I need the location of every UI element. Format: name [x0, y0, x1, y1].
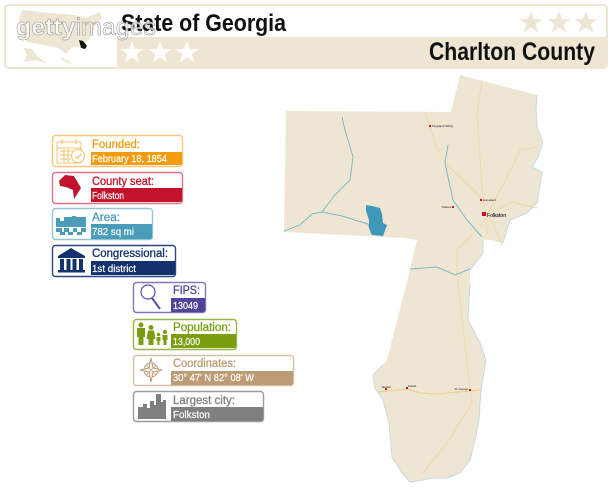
town: Toledo	[406, 384, 417, 389]
panel: fips: FIPS:	[173, 285, 200, 297]
panel: largest city: Largest city:	[173, 395, 235, 407]
lake	[366, 205, 387, 236]
icon: magnifier	[141, 285, 160, 309]
panel: coordinates: 30° 47' N 82° 08' W	[173, 373, 255, 384]
town: St. George: St. George	[454, 387, 468, 391]
panel: congressional: Congressional:	[92, 248, 168, 260]
panel: coordinates	[134, 356, 294, 386]
panel: largest city	[134, 392, 264, 422]
panel: largest city: Folkston	[173, 410, 210, 421]
panel: county seat: County seat:	[92, 176, 154, 188]
icon: area grid	[56, 216, 86, 235]
panel: congressional	[52, 246, 176, 276]
panel: county seat	[52, 172, 182, 204]
panel: area	[52, 208, 152, 240]
panel: fips: 13049	[173, 301, 198, 312]
county map	[284, 75, 543, 482]
icon: white stars	[120, 41, 198, 62]
town: Moniac: Moniac	[382, 385, 392, 389]
roads	[378, 80, 538, 473]
town: Kingsland Siding: Kingsland Siding	[432, 124, 453, 128]
icon: US map with Georgia	[19, 10, 102, 65]
panel: fips	[134, 282, 206, 312]
icon: cream stars	[520, 11, 598, 32]
panel: founded: Founded:	[92, 139, 140, 151]
icon: family	[137, 322, 168, 345]
town: Folkston: Folkston	[487, 213, 506, 219]
title: State of Georgia	[121, 10, 287, 37]
coastline edge	[373, 95, 543, 482]
icon: calendar	[57, 139, 84, 163]
watermark: gettyimages	[16, 14, 156, 41]
panel: congressional: 1st district	[92, 264, 136, 275]
town: Traders Hill: Traders	[441, 205, 452, 209]
town: Folkston	[482, 212, 506, 219]
header banner	[5, 5, 607, 68]
icon: skyline	[138, 394, 166, 419]
panel: area: Area:	[92, 212, 120, 224]
panel: population: 13,000	[173, 337, 200, 348]
town: Homeland: Homeland	[483, 198, 496, 202]
icon: compass	[140, 358, 162, 382]
town: Toledo: Toledo	[408, 384, 417, 388]
panel: coordinates: Coordinates:	[173, 358, 236, 370]
panel: founded	[52, 136, 182, 166]
icon: capitol building	[58, 248, 85, 272]
rivers	[284, 117, 482, 275]
icon: county silhouette	[59, 175, 81, 199]
panel: county seat: Folkston	[92, 191, 124, 202]
panel: population: Population:	[173, 322, 231, 334]
panel: founded: February 18, 1854	[92, 154, 167, 165]
panel: population	[134, 320, 236, 350]
panel: area: 782 sq mi	[92, 227, 134, 238]
